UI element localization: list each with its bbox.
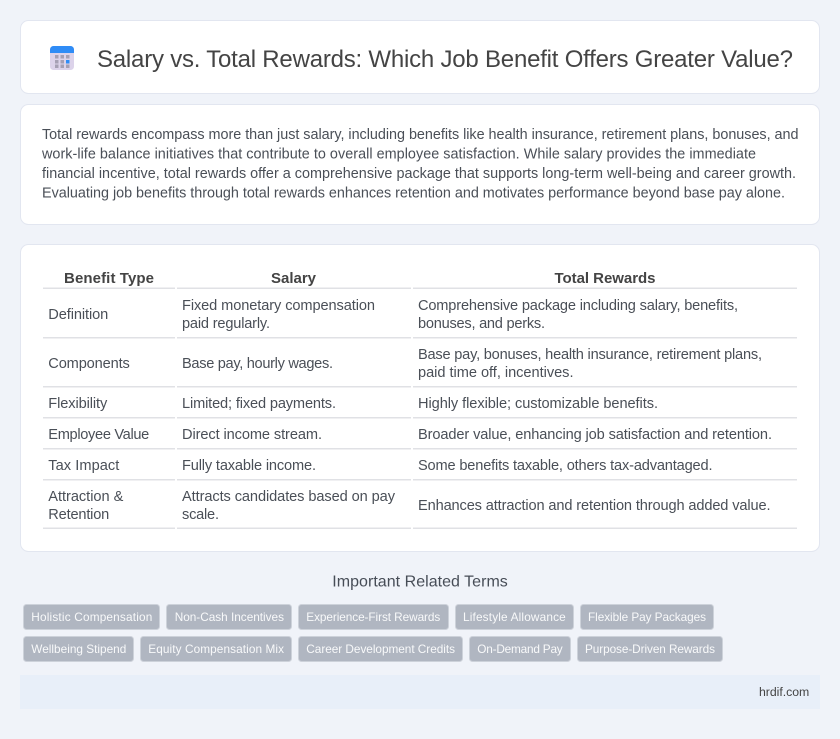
table row: components: paid time off, incentives.	[418, 365, 574, 381]
table row: definition: Fixed monetary compensation	[182, 298, 375, 314]
text block: introduction paragraph: financial incentive, total rewards offer a comprehensive package that supports long-term well-being and career growth.	[42, 166, 796, 182]
tag: career development credits: Career Development Credits	[306, 642, 455, 656]
table row: attraction and retention: scale.	[182, 507, 219, 523]
tag: non-cash incentives	[166, 604, 292, 630]
tag: flexible pay packages	[580, 604, 714, 630]
panel: header	[20, 20, 820, 94]
related terms tags	[24, 604, 722, 662]
table row: attraction and retention: Attraction &	[48, 489, 124, 505]
table header row: Salary	[271, 270, 317, 287]
table row: employee value: Employee Value	[48, 427, 149, 443]
table row: attraction and retention	[43, 489, 797, 529]
table row: attraction and retention: Enhances attraction and retention through added value.	[418, 498, 770, 514]
footer source text: hrdif.com	[759, 685, 809, 699]
tag: flexible pay packages: Flexible Pay Packages	[588, 610, 706, 624]
table row: flexibility: Flexibility	[48, 396, 108, 412]
tag: on-demand pay	[470, 636, 570, 662]
table header row: Benefit Type	[64, 270, 154, 287]
table row: flexibility: Limited; fixed payments.	[182, 396, 336, 412]
table row: employee value: Broader value, enhancing job satisfaction and retention.	[418, 427, 772, 443]
table row: definition: bonuses, and perks.	[418, 316, 545, 332]
table row: definition: paid regularly.	[182, 316, 270, 332]
tag: non-cash incentives: Non-Cash Incentives	[175, 610, 284, 624]
table row: tax impact: Some benefits taxable, others tax-advantaged.	[418, 458, 712, 474]
tag: purpose-driven rewards	[578, 636, 722, 662]
footer	[20, 675, 820, 709]
tag: purpose-driven rewards: Purpose-Driven Rewards	[585, 642, 715, 656]
panel: introduction	[20, 104, 820, 224]
table row: employee value	[43, 427, 797, 450]
tag: career development credits	[298, 636, 462, 662]
text block: introduction paragraph: Total rewards encompass more than just salary, including benefits like health insurance, retirement plans, bonuses, and	[42, 127, 798, 143]
table row: definition: Comprehensive package including salary, benefits,	[418, 298, 738, 314]
title: Salary vs. Total Rewards: Which Job Benefit Offers Greater Value?	[97, 46, 793, 73]
heading: important related terms: Important Related Terms	[332, 574, 508, 590]
tag: equity compensation mix: Equity Compensation Mix	[148, 642, 284, 656]
table row: tax impact: Tax Impact	[48, 458, 119, 474]
icon: calendar	[50, 46, 74, 70]
tag: holistic compensation	[24, 604, 160, 630]
text block: introduction paragraph: Evaluating job benefits through total rewards enhances retention and motivates performance beyond base pay alone.	[42, 186, 785, 202]
table row: components: Base pay, hourly wages.	[182, 356, 333, 372]
table row: tax impact: Fully taxable income.	[182, 458, 316, 474]
table row: components	[43, 347, 797, 388]
table row: definition: Definition	[48, 307, 108, 323]
table row: components: Components	[48, 356, 130, 372]
tag: wellbeing stipend: Wellbeing Stipend	[31, 642, 126, 656]
table row: employee value: Direct income stream.	[182, 427, 322, 443]
tag: wellbeing stipend	[24, 636, 134, 662]
table row: flexibility: Highly flexible; customizable benefits.	[418, 396, 658, 412]
tag: lifestyle allowance: Lifestyle Allowance	[463, 610, 566, 624]
text block: introduction paragraph: work-life balance initiatives that contribute to overall employee satisfaction. While salary provides the immediate	[41, 146, 756, 162]
table row: flexibility	[43, 396, 797, 418]
table row: attraction and retention: Retention	[48, 507, 109, 523]
tag: lifestyle allowance	[456, 604, 574, 630]
table header row	[43, 270, 797, 289]
tag: equity compensation mix	[140, 636, 292, 662]
panel: comparison table	[20, 244, 820, 552]
table row: tax impact	[43, 458, 797, 480]
tag: experience-first rewards	[298, 604, 448, 630]
table header row: Total Rewards	[554, 270, 656, 287]
text block: introduction paragraph	[41, 127, 798, 202]
tag: holistic compensation: Holistic Compensation	[31, 610, 152, 624]
table row: definition	[43, 298, 797, 338]
table row: attraction and retention: Attracts candidates based on pay	[182, 489, 396, 505]
tag: on-demand pay: On-Demand Pay	[477, 642, 563, 656]
tag: experience-first rewards: Experience-First Rewards	[306, 610, 440, 624]
table row: components: Base pay, bonuses, health insurance, retirement plans,	[418, 347, 762, 363]
